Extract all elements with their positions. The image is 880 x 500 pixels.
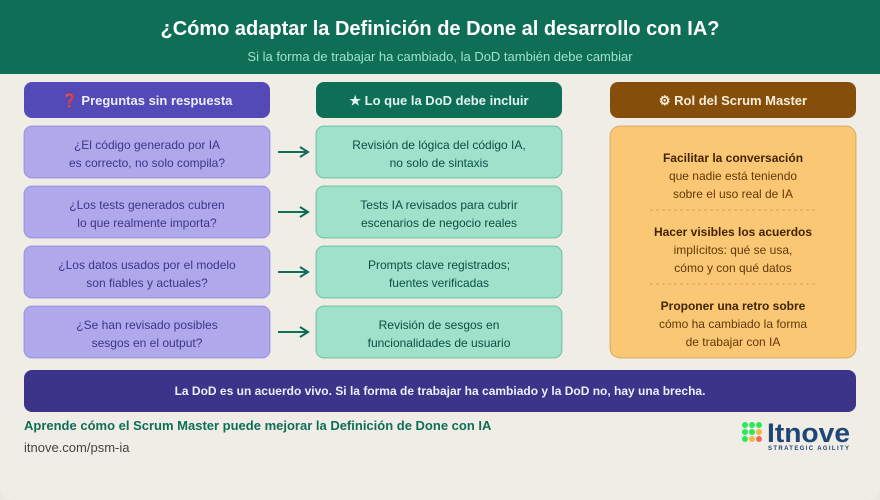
column heading: Scrum Master bbox=[610, 82, 856, 118]
column heading: preguntas: ❓ Preguntas sin respuesta bbox=[62, 93, 233, 108]
question 2 bbox=[24, 186, 270, 238]
column heading: preguntas bbox=[24, 82, 270, 118]
DoD item 4: funcionalidades de usuario bbox=[368, 336, 511, 350]
question 1: es correcto, no solo compila? bbox=[69, 156, 225, 170]
role 1 text: sobre el uso real de IA bbox=[673, 187, 793, 201]
title: ¿Cómo adaptar la Definición de Done al desarrollo con IA? bbox=[161, 18, 719, 40]
logo: Itnove: Itnove bbox=[767, 418, 850, 448]
question 4 bbox=[24, 306, 270, 358]
question 4: ¿Se han revisado posibles bbox=[76, 318, 218, 332]
role 2 text bbox=[654, 225, 812, 275]
DoD item 2: escenarios de negocio reales bbox=[361, 216, 517, 230]
DoD item 2 bbox=[316, 186, 562, 238]
role 2 text: Hacer visibles los acuerdos bbox=[654, 225, 812, 239]
logo: Itnove: STRATEGIC AGILITY bbox=[768, 446, 849, 452]
role 1 text bbox=[663, 151, 803, 201]
arrow 2 bbox=[278, 207, 308, 217]
question 4: sesgos en el output? bbox=[92, 336, 203, 350]
question 3: son fiables y actuales? bbox=[86, 276, 208, 290]
panel: Scrum Master role bbox=[610, 126, 856, 358]
DoD item 4: Revisión de sesgos en bbox=[379, 318, 499, 332]
arrow 3 bbox=[278, 267, 308, 277]
arrow 4 bbox=[278, 327, 308, 337]
subtitle: Si la forma de trabajar ha cambiado, la DoD también debe cambiar bbox=[247, 49, 633, 64]
call to action: Aprende cómo el Scrum Master puede mejorar la Definición de Done con IA bbox=[24, 418, 492, 433]
role 2 text: implícitos: qué se usa, bbox=[674, 243, 792, 257]
question 3: ¿Los datos usados por el modelo bbox=[58, 258, 236, 272]
role 3 text bbox=[659, 299, 807, 349]
role 3 text: de trabajar con IA bbox=[686, 335, 780, 349]
role 3 text: Proponer una retro sobre bbox=[661, 299, 806, 313]
column heading: DoD: ★ Lo que la DoD debe incluir bbox=[349, 93, 529, 108]
DoD item 2: Tests IA revisados para cubrir bbox=[360, 198, 518, 212]
column heading: DoD bbox=[316, 82, 562, 118]
DoD item 4 bbox=[316, 306, 562, 358]
arrow 1 bbox=[278, 147, 308, 157]
key message banner: La DoD es un acuerdo vivo. Si la forma de trabajar ha cambiado y la DoD no, hay una brecha. bbox=[175, 384, 705, 398]
question 3 bbox=[24, 246, 270, 298]
DoD item 3: fuentes verificadas bbox=[389, 276, 489, 290]
DoD item 3: Prompts clave registrados; bbox=[368, 258, 510, 272]
DoD item 1 bbox=[316, 126, 562, 178]
header band bbox=[0, 0, 880, 74]
question 2: lo que realmente importa? bbox=[77, 216, 217, 230]
DoD item 3 bbox=[316, 246, 562, 298]
question 2: ¿Los tests generados cubren bbox=[69, 198, 225, 212]
DoD item 1: no solo de sintaxis bbox=[390, 156, 488, 170]
question 1: ¿El código generado por IA bbox=[74, 138, 220, 152]
role 1 text: Facilitar la conversación bbox=[663, 151, 803, 165]
role 3 text: cómo ha cambiado la forma bbox=[659, 317, 807, 331]
question 1 bbox=[24, 126, 270, 178]
link: itnove.com/psm-ia bbox=[24, 440, 130, 455]
DoD item 1: Revisión de lógica del código IA, bbox=[352, 138, 526, 152]
key message banner bbox=[24, 370, 856, 412]
role 1 text: que nadie está teniendo bbox=[669, 169, 797, 183]
role 2 text: cómo y con qué datos bbox=[674, 261, 792, 275]
column heading: Scrum Master: ⚙ Rol del Scrum Master bbox=[659, 93, 807, 108]
logo: Itnove bbox=[742, 418, 850, 452]
